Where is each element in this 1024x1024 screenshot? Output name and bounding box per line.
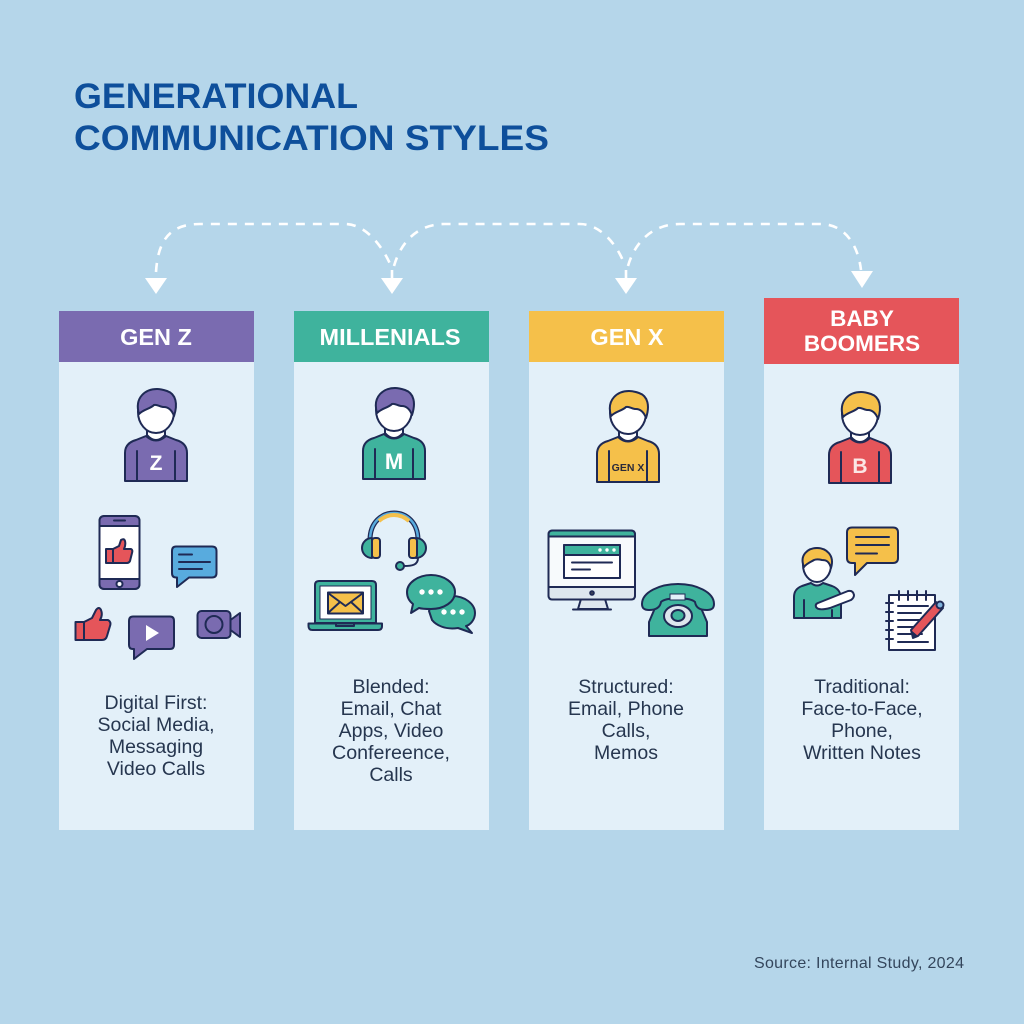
icon: video message bubble [129,616,174,659]
text: Millenials styles [332,676,450,786]
icon: Gen X person: GEN X [612,462,644,474]
icon: blue chat bubble [172,546,216,587]
icon: laptop with envelope [308,581,382,630]
text: Gen Z styles: Video Calls [107,758,205,780]
icon: notepad and pencil [886,591,944,650]
header: Gen X [529,311,724,362]
text: Gen Z styles [97,692,215,780]
icon: video camera [198,611,240,638]
header: Gen X: GEN X [590,324,664,350]
text: Baby Boomers styles: Phone, [831,720,893,742]
text: Gen X styles: Email, Phone [568,698,684,720]
title: GENERATIONAL [74,76,358,116]
text: Millenials styles: Confereence, [332,742,450,764]
text: Baby Boomers styles: Face-to-Face, [801,698,923,720]
icon: Gen X person [597,391,659,482]
header: Baby Boomers: BOOMERS [804,331,920,356]
icon: chat bubbles [407,575,475,633]
text: Baby Boomers styles [801,676,923,764]
source note: Source: Internal Study, 2024 [754,955,964,972]
header: Baby Boomers: BABY [830,306,894,331]
text: Baby Boomers styles: Written Notes [803,742,921,764]
text: Millenials styles: Apps, Video [339,720,444,742]
header: Baby Boomers [764,298,959,364]
icon: rotary telephone [642,584,714,636]
header: Gen Z: GEN Z [120,324,192,350]
text: Gen Z styles: Digital First: [105,692,207,714]
text: Gen X styles: Memos [594,742,658,764]
icon: headset [362,513,426,570]
header: Millenials [294,311,489,362]
icon: Gen Z person: Z [150,452,163,475]
text: Gen Z styles: Messaging [109,736,203,758]
title [74,76,549,158]
text: Gen Z styles: Social Media, [97,714,215,736]
panel: Gen Z [59,311,254,830]
icon: smartphone with thumbs-up [100,516,140,589]
icon: desktop monitor [548,530,635,610]
header: Gen Z [59,311,254,362]
text: Millenials styles: Calls [369,764,413,786]
icon: Millenial person: M [385,449,403,474]
icon: person speaking [794,548,854,618]
text: Gen X styles [568,676,684,764]
icon: Millenial person [363,388,425,479]
panel: Baby Boomers [764,298,959,830]
icon: yellow speech bubble [847,528,898,575]
text: Baby Boomers styles: Traditional: [814,676,910,698]
panel: Gen X [529,311,724,830]
dashed arrows between generations [145,224,873,294]
icon: Baby Boomer person [829,392,891,483]
text: Gen X styles: Calls, [602,720,650,742]
panel: Millenials [294,311,489,830]
text: Millenials styles: Blended: [353,676,429,698]
title: COMMUNICATION STYLES [74,118,549,158]
text: Gen X styles: Structured: [578,676,674,698]
icon: large thumbs-up [76,608,110,640]
icon: Gen Z person [125,389,187,481]
header: Millenials: MILLENIALS [320,324,460,350]
icon: Baby Boomer person: B [852,455,868,478]
text: Millenials styles: Email, Chat [341,698,442,720]
